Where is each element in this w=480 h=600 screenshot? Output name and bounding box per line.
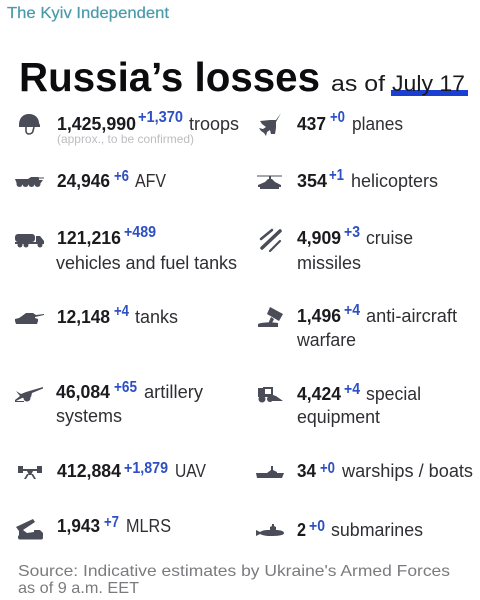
row: MLRS: +7 xyxy=(104,514,119,531)
row: MLRS: MLRS xyxy=(126,516,171,536)
row: artillery systems: systems xyxy=(56,406,122,426)
icon: missiles xyxy=(261,230,280,251)
row: warships / boats: warships / boats xyxy=(341,461,473,481)
row: submarines xyxy=(256,518,423,540)
row: cruise missiles: +3 xyxy=(344,224,360,241)
row: UAV: UAV xyxy=(175,461,206,481)
icon: helmet xyxy=(19,114,40,134)
row: anti-aircraft warfare: anti-aircraft xyxy=(366,306,457,326)
row: cruise missiles: 4,909 xyxy=(297,227,341,248)
row: warships / boats: +0 xyxy=(320,460,335,477)
row: special equipment: +4 xyxy=(344,381,360,398)
row: troops: (approx., to be confirmed) xyxy=(57,132,194,146)
row: troops: 1,425,990 xyxy=(57,113,136,134)
row: anti-aircraft warfare: warfare xyxy=(296,330,356,350)
row: planes xyxy=(259,109,403,136)
row: UAV: 412,884 xyxy=(57,460,122,481)
row: troops xyxy=(19,109,239,146)
row: helicopters: +1 xyxy=(329,167,344,184)
source note: Source: Indicative estimates by Ukraine's Armed Forces xyxy=(18,563,450,580)
row: artillery systems: artillery xyxy=(144,382,203,402)
row: vehicles and fuel tanks: 121,216 xyxy=(57,227,121,248)
icon: plane xyxy=(259,113,281,136)
row: MLRS xyxy=(16,514,171,540)
source note: as of 9 a.m. EET xyxy=(18,580,139,597)
row: special equipment: special xyxy=(366,384,421,404)
title: as of xyxy=(331,71,386,96)
row: anti-aircraft warfare: 1,496 xyxy=(297,305,341,326)
row: anti-aircraft warfare xyxy=(258,302,457,350)
title: July 17 xyxy=(392,71,465,96)
row: tanks: 12,148 xyxy=(57,306,110,327)
icon: tank xyxy=(15,313,44,324)
row: planes: +0 xyxy=(330,109,345,126)
row: planes: 437 xyxy=(297,113,326,134)
icon: warship xyxy=(256,466,284,478)
icon: helicopter xyxy=(257,176,282,189)
row: submarines: submarines xyxy=(331,520,423,540)
row: AFV xyxy=(15,168,166,191)
row: tanks: tanks xyxy=(135,307,178,327)
row: tanks xyxy=(15,303,178,327)
icon: anti-aircraft launcher xyxy=(258,307,283,327)
row: cruise missiles: missiles xyxy=(297,253,361,273)
row: helicopters: helicopters xyxy=(351,171,438,191)
icon: fuel truck xyxy=(15,234,44,248)
row: MLRS: 1,943 xyxy=(57,515,100,536)
row: special equipment xyxy=(258,381,421,427)
row: artillery systems: 46,084 xyxy=(56,381,111,402)
row: special equipment: equipment xyxy=(297,407,380,427)
row: special equipment: 4,424 xyxy=(297,383,342,404)
row: warships / boats: 34 xyxy=(297,460,317,481)
icon: submarine xyxy=(256,524,284,536)
row: AFV: 24,946 xyxy=(57,170,110,191)
row: helicopters: 354 xyxy=(297,170,328,191)
title xyxy=(19,54,468,100)
row: warships / boats xyxy=(256,460,473,481)
row: submarines: +0 xyxy=(309,518,325,535)
icon: loader xyxy=(258,387,283,402)
row: anti-aircraft warfare: +4 xyxy=(344,302,360,319)
row: UAV: +1,879 xyxy=(124,460,168,477)
row: artillery systems: +65 xyxy=(114,379,137,396)
row: tanks: +4 xyxy=(114,303,129,320)
row: artillery systems xyxy=(15,379,203,426)
icon: rocket launcher xyxy=(16,519,43,540)
row: cruise missiles: cruise xyxy=(366,228,413,248)
icon: armoured vehicle xyxy=(15,177,44,187)
publisher name: The Kyiv Independent xyxy=(7,5,170,22)
row: helicopters xyxy=(257,167,438,191)
icon: drone xyxy=(18,466,42,479)
icon: artillery gun xyxy=(15,387,43,402)
row: AFV: AFV xyxy=(135,171,166,191)
title: Russia’s losses xyxy=(19,54,320,100)
row: troops: troops xyxy=(189,114,239,134)
row: submarines: 2 xyxy=(297,519,306,540)
row: UAV xyxy=(18,460,206,481)
source note xyxy=(18,563,450,597)
row: cruise missiles xyxy=(261,224,413,273)
row: vehicles and fuel tanks xyxy=(15,224,237,273)
row: vehicles and fuel tanks: vehicles and fuel tanks xyxy=(56,253,237,273)
row: AFV: +6 xyxy=(114,168,129,185)
row: planes: planes xyxy=(352,114,403,134)
row: vehicles and fuel tanks: +489 xyxy=(124,224,156,241)
row: troops: +1,370 xyxy=(138,109,183,126)
